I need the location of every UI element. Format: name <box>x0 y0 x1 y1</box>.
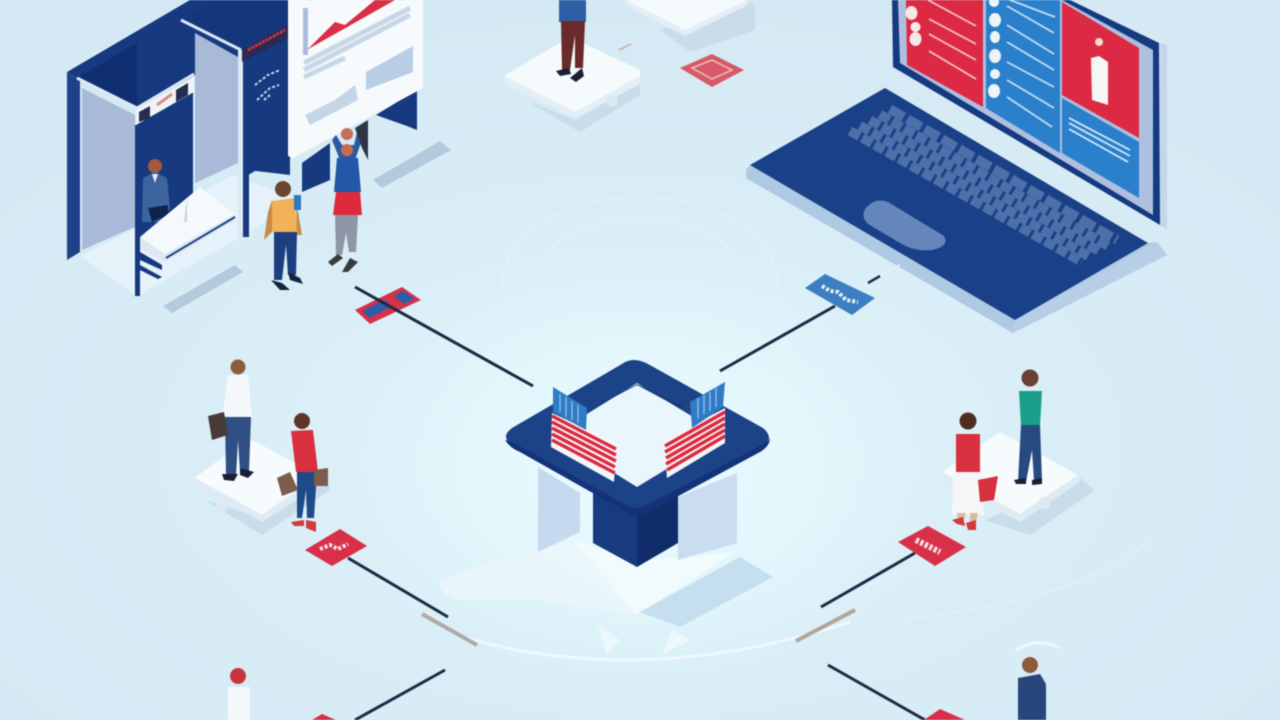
pedestal right translucent wall <box>678 473 737 560</box>
booth roof and back wall <box>67 0 290 180</box>
pedestal shadow <box>640 557 773 627</box>
right platform with two figures <box>942 370 1095 535</box>
poster chart <box>305 0 395 52</box>
right flag <box>664 382 725 478</box>
keyboard keys <box>850 109 1117 262</box>
laptop cable <box>862 265 900 285</box>
seated poll worker <box>142 159 170 222</box>
booth left post <box>67 72 80 260</box>
pedestal left translucent wall <box>538 467 580 552</box>
pedestal white floor <box>540 540 733 615</box>
laptop base rim <box>746 165 1167 333</box>
screen blue list panel <box>986 0 1060 153</box>
laptop keyboard deck <box>750 88 1148 320</box>
laptop screen inner <box>898 0 1153 215</box>
red sign upper left <box>355 287 421 324</box>
laptop trackpad <box>863 200 946 250</box>
connector line and sign: upper left <box>355 287 533 386</box>
pedestal column <box>593 490 637 567</box>
woman with briefcase <box>277 413 328 532</box>
tan bars <box>422 610 855 645</box>
connector line and sign: lower right <box>821 526 966 607</box>
booth second front panel <box>243 38 290 237</box>
left platform with two figures <box>195 360 330 535</box>
booth floor shadow <box>163 265 243 313</box>
connector line and sign: upper right <box>720 274 875 371</box>
poster bar block <box>366 46 413 90</box>
man with briefcase <box>208 360 254 481</box>
booth sign strip 2 <box>242 24 288 62</box>
red floor mat <box>680 54 744 87</box>
booth front post <box>135 125 140 296</box>
bottom left figure and connector <box>228 668 445 720</box>
left flag <box>551 387 617 482</box>
front bottom post <box>243 60 249 237</box>
platform <box>195 438 318 515</box>
woman in red top and white skirt <box>952 412 998 530</box>
red sign <box>898 526 966 566</box>
centre pedestal <box>439 360 773 627</box>
hologram arc under pedestal <box>460 622 850 660</box>
man in teal shirt <box>1014 370 1042 485</box>
laptop screen bezel <box>892 0 1160 225</box>
person holding up the poster <box>328 120 368 272</box>
booth sign strip 1 <box>136 76 194 125</box>
bottom right figure and connector <box>828 643 1060 720</box>
laptop <box>746 0 1167 333</box>
booth grey side panel 1 <box>82 88 135 250</box>
screen blue text panel <box>1062 98 1139 198</box>
laptop screen outer glow <box>1160 43 1167 230</box>
booth pictogram <box>255 70 280 100</box>
person in orange shirt <box>264 181 303 290</box>
presentation poster <box>288 0 423 158</box>
poll desk <box>140 187 235 279</box>
top platform with standing figure <box>505 0 640 132</box>
floor under booths <box>80 175 300 296</box>
second top table <box>625 0 755 52</box>
connector line and sign: lower left <box>305 529 448 617</box>
poster text lines <box>304 8 410 77</box>
blue sign <box>805 274 875 315</box>
screen red panel <box>906 0 983 107</box>
platform shadow <box>205 478 330 535</box>
voting booths <box>67 0 451 313</box>
booth grey side panel 2 <box>195 33 238 183</box>
pedestal top ring <box>506 360 769 512</box>
hologram rings behind the centre <box>502 197 1150 620</box>
red sign <box>305 529 367 566</box>
standing figure <box>559 0 586 22</box>
screen red portrait panel <box>1062 2 1139 138</box>
